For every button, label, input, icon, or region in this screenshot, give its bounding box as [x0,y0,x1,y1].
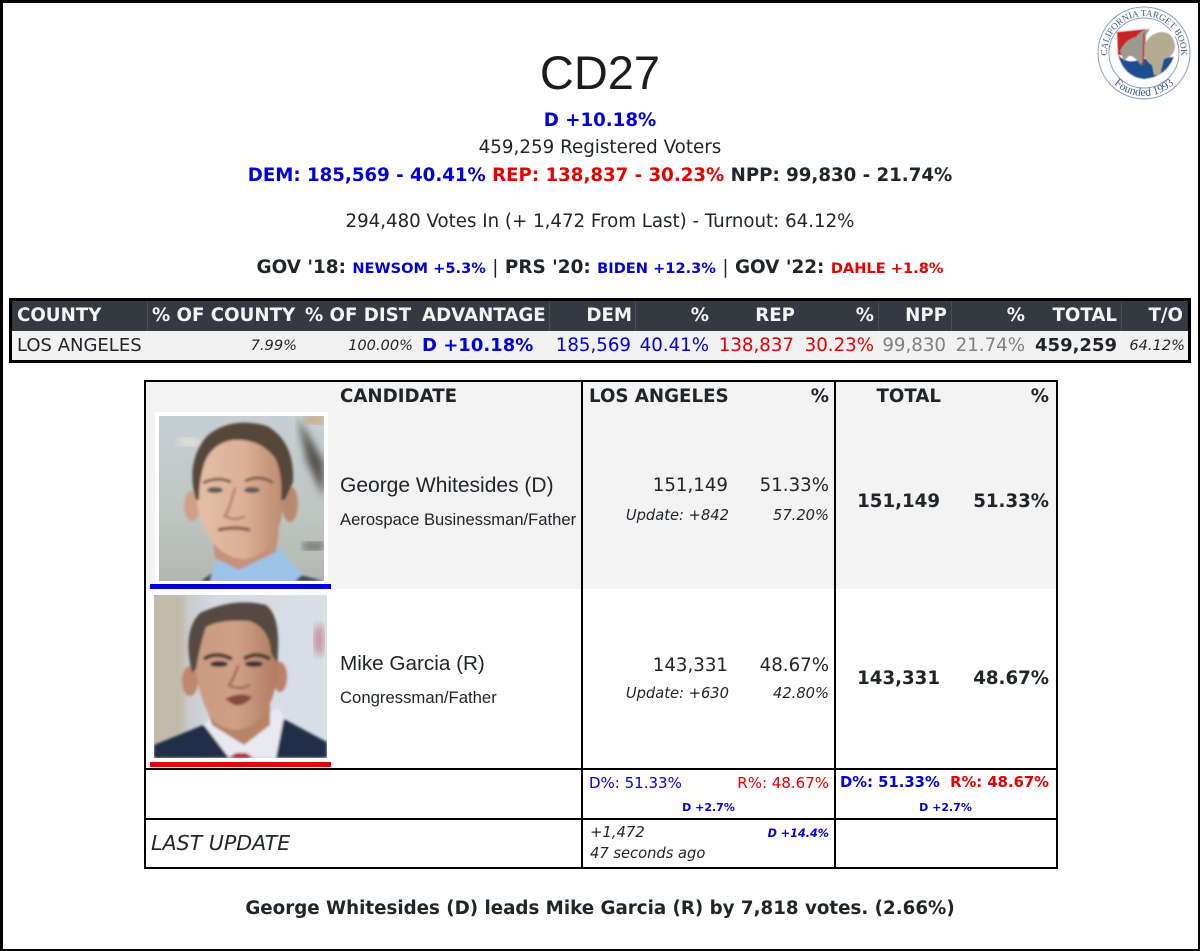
row: percent of county: 7.99% [251,337,297,354]
party bar: blue [150,584,331,589]
header: advantage: ADVANTAGE [422,305,546,326]
total D percent: D%: 51.33% [840,774,940,791]
last update time: 47 seconds ago [590,845,705,862]
logo: California Target Book seal: Founded 1993 [1114,78,1173,96]
header: total: TOTAL [1052,305,1117,326]
party bar: red [150,762,331,767]
portrait: Mike Garcia [154,595,327,758]
row: REP percent: 30.23% [805,335,874,356]
table header band [12,301,1188,331]
last update votes: +1,472 [590,824,645,841]
header: percent of district: % OF DIST [305,305,411,326]
first candidate row fill [146,382,1056,589]
row rule: percent summary top [145,768,1056,770]
row: NPP percent: 21.74% [956,335,1025,356]
Garcia total percent: 48.67% [973,668,1049,689]
header: turnout: T/O [1148,305,1183,326]
total R percent: R%: 48.67% [950,774,1049,791]
row: REP votes: 138,837 [719,335,794,356]
header: REP: REP [755,305,795,326]
row: turnout: 64.12% [1129,337,1185,354]
header: DEM percent: % [691,305,709,326]
row: percent of district: 100.00% [348,337,413,354]
header: county percent: % [811,386,829,407]
column rule: los angeles left [581,381,583,868]
portrait: George Whitesides [155,412,328,584]
Whitesides total percent: 51.33% [973,491,1049,512]
candidate occupation: Garcia: Congressman/Father [340,688,497,707]
row: advantage: D +10.18% [422,335,533,356]
header: REP percent: % [856,305,874,326]
header: county: COUNTY [17,305,101,326]
votes in and turnout: 294,480 Votes In (+ 1,472 From Last) - Turnout: 64.12% [346,211,854,232]
Whitesides update: Update: +842 [626,507,729,524]
registered voters: 459,259 Registered Voters [479,137,721,158]
candidate name: Garcia: Mike Garcia (R) [340,652,485,675]
header separators [147,301,148,331]
header: total: TOTAL [876,386,941,407]
margin headline: D +10.18%: D +10.18% [544,110,656,131]
party registration line: DEM: 185,569 - 40.41% REP: 138,837 - 30.23% NPP: 99,830 - 21.74% [248,165,952,186]
Garcia update percent: 42.80% [773,685,829,702]
past results line: GOV '18: NEWSOM +5.3% | PRS '20: BIDEN +12.3% | GOV '22: DAHLE +1.8% [256,257,944,278]
header: NPP: NPP [905,305,947,326]
header: DEM: DEM [586,305,632,326]
table frame and row fills [9,298,1191,363]
Garcia county percent: 48.67% [760,655,829,676]
row rule: last update top [145,818,1056,820]
Garcia update: Update: +630 [626,685,729,702]
header: candidate: CANDIDATE [340,386,457,407]
row: DEM percent: 40.41% [640,335,709,356]
row: NPP votes: 99,830 [882,335,946,356]
header: total percent: % [1031,386,1049,407]
row: DEM votes: 185,569 [556,335,631,356]
total margin: D +2.7% [919,801,972,814]
Whitesides update percent: 57.20% [773,507,829,524]
county margin: D +2.7% [682,801,735,814]
logo: California Target Book seal [1098,6,1190,100]
candidate occupation: Whitesides: Aerospace Businessman/Father [340,510,576,529]
last update margin: D +14.4% [768,827,829,840]
logo: California Target Book seal: CALIFORNIA TARGET BOOK [1100,10,1188,56]
row: total: 459,259 [1035,335,1117,356]
summary sentence: George Whitesides (D) leads Mike Garcia (R) by 7,818 votes. (2.66%) [245,898,955,919]
column rule: total left [834,381,836,868]
county R percent: R%: 48.67% [737,774,829,792]
Whitesides county percent: 51.33% [760,475,829,496]
header: los angeles: LOS ANGELES [589,386,729,407]
Whitesides total votes: 151,149 [857,491,940,512]
Garcia county votes: 143,331 [653,655,728,676]
header: NPP percent: % [1007,305,1025,326]
results table frame [144,380,1058,869]
Garcia total votes: 143,331 [857,668,940,689]
county D percent: D%: 51.33% [589,774,682,792]
header: percent of county: % OF COUNTY [152,305,295,326]
last update label: LAST UPDATE [151,831,290,855]
title: CD27 [540,46,660,99]
row: county name: LOS ANGELES [17,335,142,356]
candidate name: Whitesides: George Whitesides (D) [340,474,554,497]
Whitesides county votes: 151,149 [653,475,728,496]
county table [9,298,1191,363]
